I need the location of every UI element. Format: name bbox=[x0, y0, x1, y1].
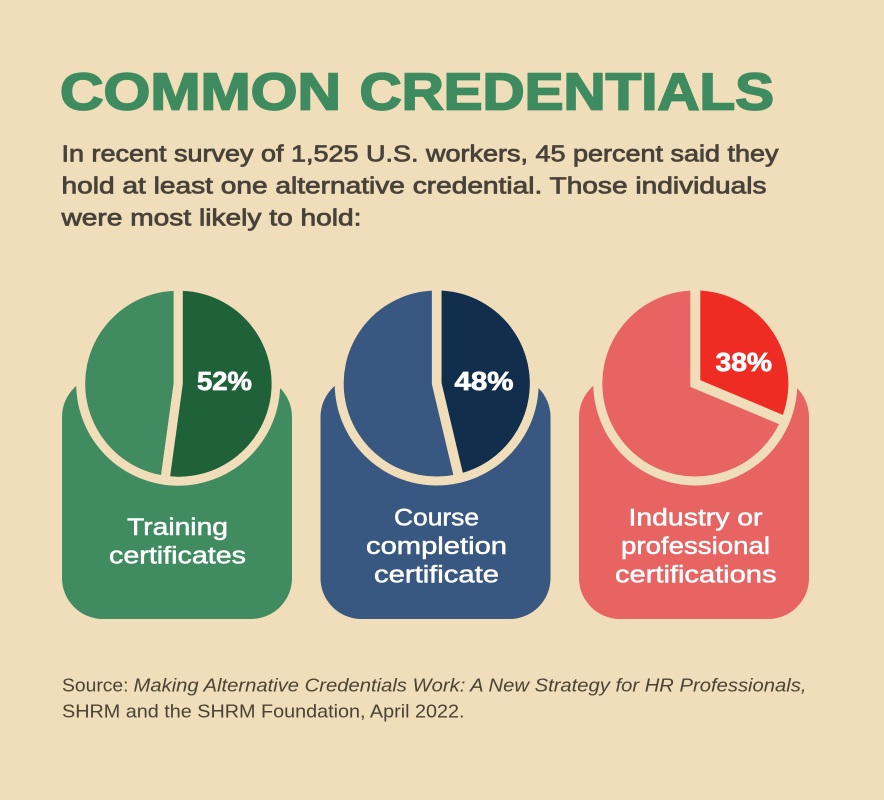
label: industry or professional certifications bbox=[615, 504, 776, 589]
card background: industry or professional certifications bbox=[579, 376, 809, 619]
title: CREDENTIALS bbox=[360, 64, 774, 122]
pie chart: 48%: 48% bbox=[454, 368, 514, 396]
intro text block: In recent survey of 1,525 U.S. workers, 45 percent said they bbox=[62, 141, 779, 167]
label: course completion certificate: completion bbox=[366, 533, 507, 560]
source note: SHRM and the SHRM Foundation, April 2022. bbox=[62, 700, 464, 721]
card background: training certificates bbox=[62, 376, 292, 619]
pie chart: 38%: 38% bbox=[716, 349, 772, 377]
label: course completion certificate: certificate bbox=[374, 562, 499, 589]
panel: training certificates bbox=[62, 282, 292, 619]
source note: Making Alternative Credentials Work: A New Strategy for HR Professionals, bbox=[134, 675, 806, 696]
title: COMMON bbox=[60, 64, 341, 122]
source note bbox=[62, 675, 806, 721]
source note: Source: bbox=[62, 675, 128, 696]
label: training certificates: Training bbox=[127, 514, 228, 541]
intro text block bbox=[60, 141, 779, 230]
label: training certificates bbox=[109, 514, 246, 569]
pie chart: 52%: 52% bbox=[197, 368, 252, 396]
panel: course completion certificate bbox=[320, 282, 550, 619]
intro text block: hold at least one alternative credential. Those individuals bbox=[62, 172, 766, 198]
card background: course completion certificate bbox=[320, 376, 550, 619]
label: course completion certificate: Course bbox=[394, 504, 479, 531]
label: industry or professional certifications: professional bbox=[621, 533, 770, 560]
label: industry or professional certifications: certifications bbox=[615, 562, 776, 589]
label: course completion certificate bbox=[366, 504, 507, 589]
pie chart: 52% bbox=[76, 282, 280, 486]
title bbox=[60, 64, 774, 122]
intro text block: were most likely to hold: bbox=[60, 204, 361, 230]
label: training certificates: certificates bbox=[109, 542, 246, 569]
pie chart: 48% bbox=[335, 282, 539, 486]
pie chart: 38% bbox=[593, 282, 797, 486]
label: industry or professional certifications: Industry or bbox=[628, 504, 762, 531]
panel: industry or professional certifications bbox=[579, 282, 809, 619]
